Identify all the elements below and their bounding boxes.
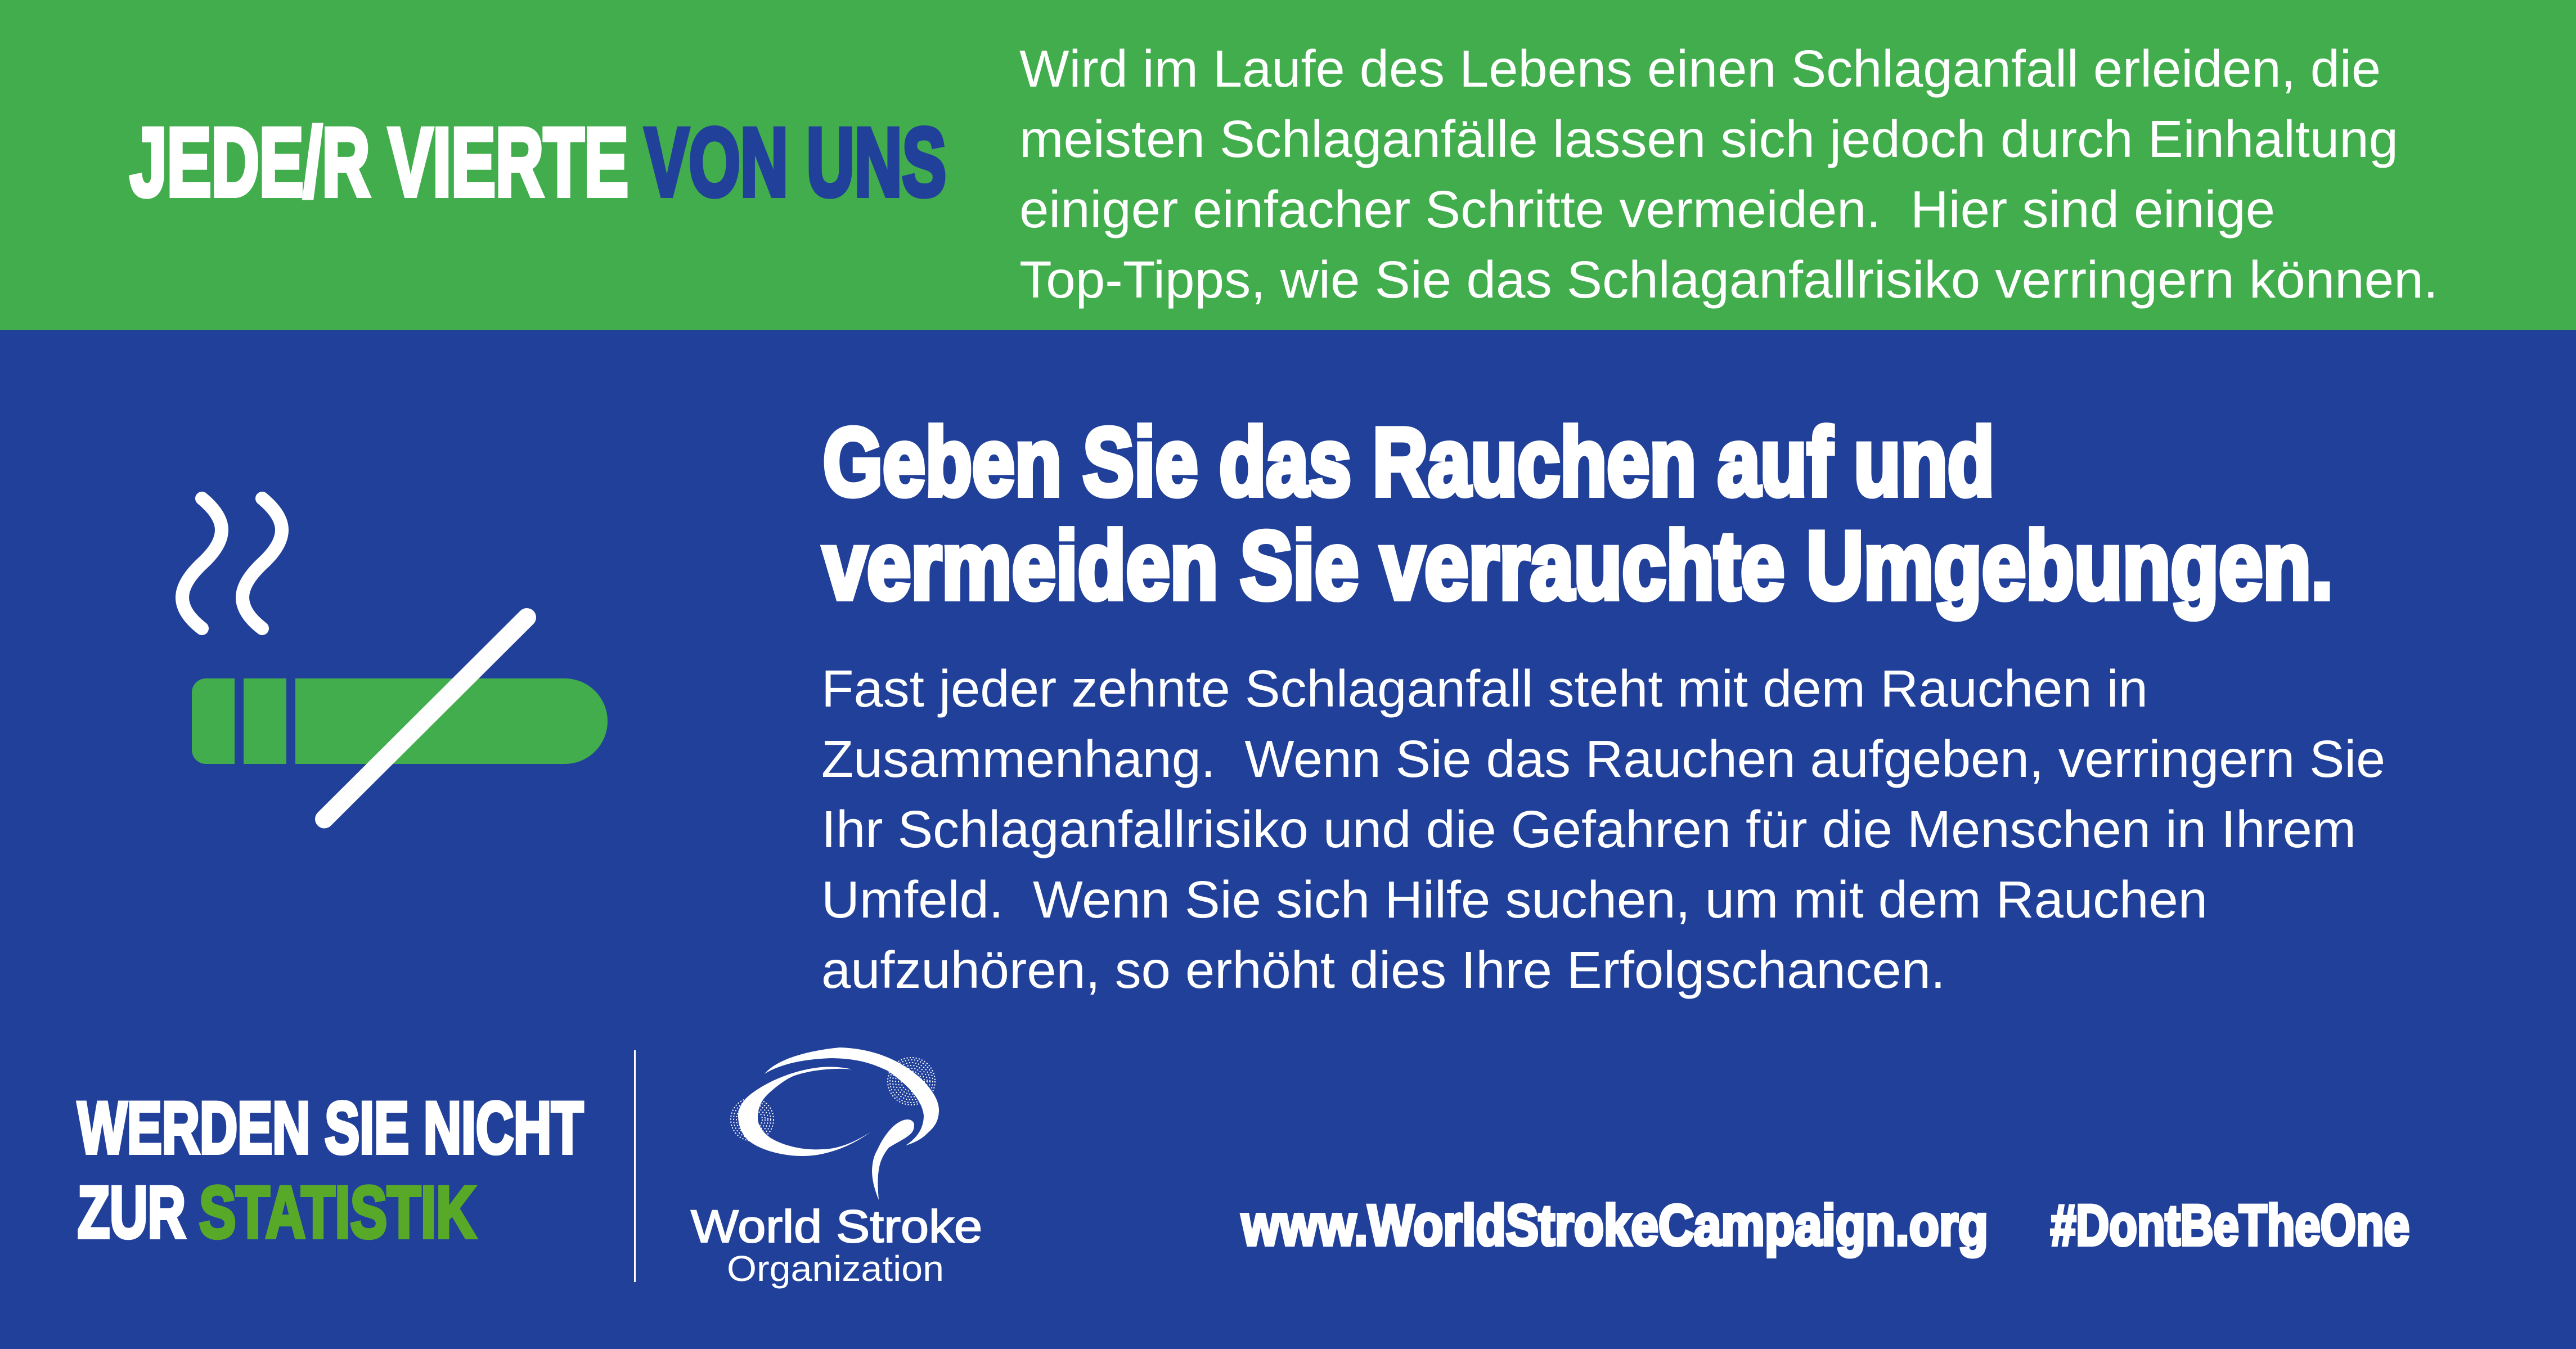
text block: intro: Top-Tipps, wie Sie das Schlaganfallrisiko verringern können.: [1019, 250, 2438, 309]
hashtag: #DontBeTheOne: [2051, 1193, 2409, 1257]
logo: World Stroke Organization: World Stroke: [691, 1201, 982, 1252]
heading: Jede/r vierte von uns: VON UNS: [645, 108, 946, 216]
slogan: werden sie nicht zur statistik: STATISTIK: [199, 1171, 476, 1253]
text block: intro: Wird im Laufe des Lebens einen Schlaganfall erleiden, die: [1019, 39, 2381, 98]
text block: body paragraph: Fast jeder zehnte Schlaganfall steht mit dem Rauchen in: [821, 659, 2148, 718]
divider: [634, 1050, 636, 1282]
heading: quit smoking: Geben Sie das Rauchen auf und: [823, 408, 1994, 516]
url: www.WorldStrokeCampaign.org: [1241, 1193, 1988, 1257]
text block: body paragraph: Ihr Schlaganfallrisiko und die Gefahren für die Menschen in Ihrem: [821, 800, 2356, 858]
logo: World Stroke Organization: [691, 1047, 982, 1289]
slogan: werden sie nicht zur statistik: ZUR: [78, 1171, 186, 1253]
logo: World Stroke Organization: Organization: [727, 1248, 944, 1289]
heading: quit smoking: [823, 408, 2333, 619]
text block: body paragraph: Umfeld. Wenn Sie sich Hilfe suchen, um mit dem Rauchen: [821, 870, 2208, 929]
panel: top green banner: [0, 0, 2576, 330]
icon: no smoking: [182, 498, 608, 819]
text block: intro: [1019, 39, 2438, 309]
text block: intro: meisten Schlaganfälle lassen sich jedoch durch Einhaltung: [1019, 110, 2398, 168]
slogan: werden sie nicht zur statistik: WERDEN SIE NICHT: [78, 1087, 583, 1169]
text block: body paragraph: Zusammenhang. Wenn Sie das Rauchen aufgeben, verringern Sie: [821, 730, 2385, 788]
text block: intro: einiger einfacher Schritte vermeiden. Hier sind einige: [1019, 180, 2275, 239]
text block: body paragraph: aufzuhören, so erhöht dies Ihre Erfolgschancen.: [821, 941, 1945, 999]
text block: body paragraph: [821, 659, 2385, 999]
heading: Jede/r vierte von uns: JEDE/R VIERTE: [130, 108, 628, 216]
slogan: werden sie nicht zur statistik: [78, 1087, 583, 1253]
